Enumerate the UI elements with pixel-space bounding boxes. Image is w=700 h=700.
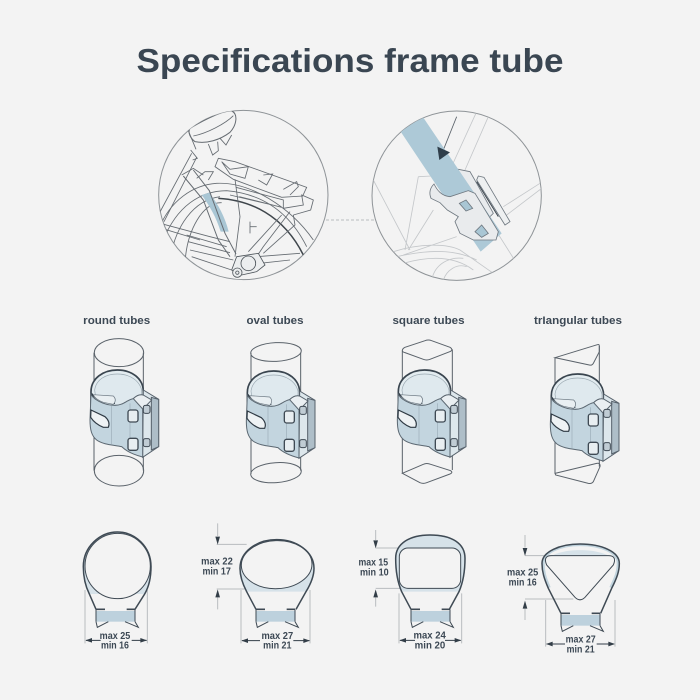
chart: square section: min 20	[415, 640, 446, 651]
heading: triangular tubes: trIangular tubes	[534, 315, 622, 327]
chart: oval section: min 17	[202, 566, 231, 577]
chart: triangular section: min 21	[567, 645, 595, 656]
connector dashed line	[216, 219, 442, 221]
chart: oval section: max 22	[201, 556, 233, 567]
chart: round section	[83, 532, 151, 651]
icon: clamp front plate	[430, 184, 498, 240]
heading: oval tubes: oval tubes	[246, 315, 304, 327]
chart: square section: max 24	[413, 631, 446, 642]
chart: triangular section: max 27	[566, 635, 596, 646]
icon: triangular tube with clamp	[550, 344, 619, 483]
heading: square tubes: square tubes	[392, 315, 464, 327]
icon: bracket rear lobe and rail	[458, 169, 510, 225]
panel: tube drawings	[90, 339, 619, 486]
panel: cross sections left	[83, 523, 314, 651]
icon: square tube with clamp	[397, 340, 466, 483]
chart: triangular section: max 25	[507, 567, 539, 578]
panel: cross sections right	[358, 530, 619, 656]
icon: highlighted seat stay	[202, 193, 229, 232]
chart: oval section	[201, 523, 314, 651]
chart: triangular section	[507, 535, 619, 656]
icon: oval tube with clamp	[246, 341, 315, 484]
chart: square section: min 10	[360, 568, 389, 579]
chart: oval section: max 27	[261, 631, 293, 642]
panel: bicycle rear overview circle	[158, 110, 328, 280]
chart: round section: min 16	[101, 640, 129, 651]
heading: round tubes: round tubes	[83, 315, 150, 327]
chart: square section	[358, 530, 465, 651]
title: Specifications frame tube	[136, 42, 564, 79]
chart: square section: max 15	[358, 558, 388, 569]
chart: round section: max 25	[100, 631, 131, 642]
arrow: points at frame tube	[437, 117, 457, 160]
chart: oval section: min 21	[263, 640, 292, 651]
icon: highlighted frame tube	[401, 117, 502, 252]
icon: rear hub	[232, 253, 265, 277]
panel: clamp zoom circle	[372, 111, 542, 280]
icon: round tube with clamp	[90, 339, 159, 486]
chart: triangular section: min 16	[509, 577, 537, 588]
